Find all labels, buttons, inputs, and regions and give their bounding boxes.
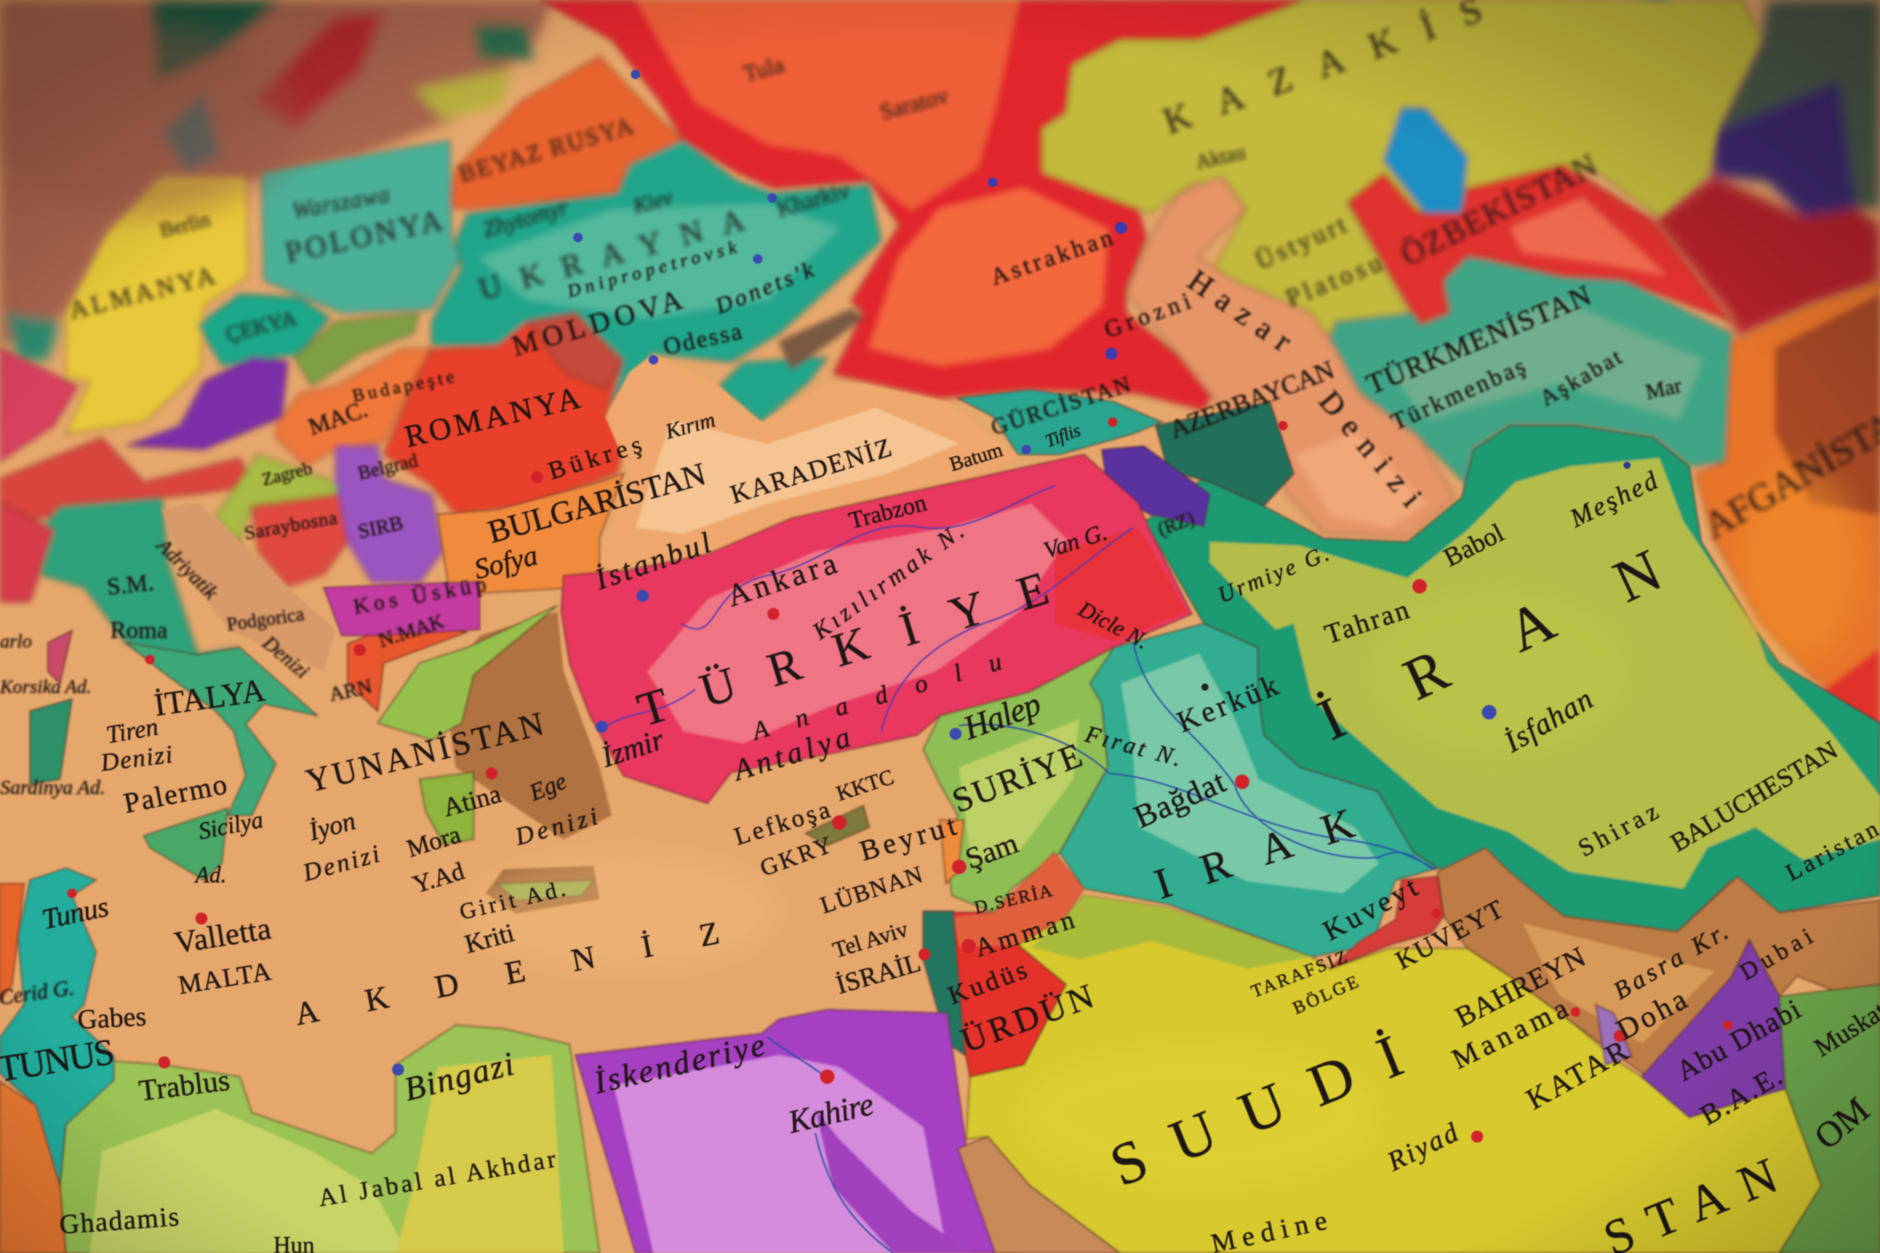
label: Kuveyt country: KUVEYT bbox=[1391, 895, 1508, 975]
label: İsrail: İSRAİL bbox=[833, 948, 924, 1000]
region: Egypt Nile band bbox=[815, 1109, 971, 1253]
label: Doha: Doha bbox=[1611, 983, 1692, 1047]
region: Jordan bbox=[946, 853, 1084, 1077]
label: Almanya: ALMANYA bbox=[67, 263, 218, 325]
label: Kiev: Kiev bbox=[630, 185, 675, 219]
label: Van G.: Van G. bbox=[1041, 520, 1111, 564]
label: Hazar: Hazar bbox=[1182, 262, 1299, 359]
label: Türkmenbaşı: Türkmenbaş bbox=[1387, 354, 1529, 436]
region: Afghanistan south red bbox=[1821, 647, 1880, 731]
region: Albania bbox=[348, 624, 468, 711]
label: Denizi Adriatic: Denizi bbox=[257, 631, 313, 683]
region: Egypt border bbox=[576, 1010, 1019, 1253]
label: Kriti: Kriti bbox=[462, 918, 517, 959]
label: Akdeniz: AKDENİZ bbox=[292, 906, 770, 1033]
label: Şiraz: Shiraz bbox=[1574, 798, 1663, 863]
region: Crete shadow bbox=[486, 866, 599, 914]
region: Israel bbox=[923, 911, 965, 1055]
region: Caspian Sea bbox=[1126, 176, 1456, 538]
region: Turkey pale interior bbox=[647, 504, 1067, 743]
label: Tel Aviv: Tel Aviv bbox=[830, 916, 911, 963]
region: Libya bbox=[60, 1025, 599, 1253]
label: Ghadamis: Ghadamis bbox=[58, 1200, 180, 1240]
label: Kerkük: Kerkük bbox=[1172, 669, 1283, 739]
label: Aşkabat: Aşkabat bbox=[1535, 344, 1626, 411]
label: Irak: IRAK bbox=[1149, 790, 1392, 909]
region: Algeria north bbox=[0, 884, 24, 1001]
label: Trablus: Trablus bbox=[137, 1064, 232, 1108]
label: Katar: KATAR bbox=[1521, 1034, 1633, 1116]
region: Armenia bbox=[1102, 446, 1210, 526]
region: Russia orange north bbox=[635, 0, 1019, 210]
region: Romania bbox=[384, 313, 629, 514]
region: Saudi Arabia bbox=[966, 896, 1821, 1253]
label: Beyrut: Beyrut bbox=[856, 810, 960, 868]
label: Bükreş: Bükreş bbox=[545, 431, 645, 485]
label: Yunanistan: YUNANİSTAN bbox=[302, 706, 547, 800]
region: Belarus bbox=[450, 56, 683, 209]
label: Moldova: MOLDOVA bbox=[509, 284, 686, 363]
label: Dubai: Dubai bbox=[1736, 924, 1818, 986]
label: İstanbul: İstanbul bbox=[590, 526, 715, 597]
in-focus regions bbox=[0, 354, 1880, 1253]
region: Hungary bbox=[276, 349, 432, 466]
label: Fırat N.: Fırat N. bbox=[1081, 721, 1184, 772]
label: Adriyatik: Adriyatik bbox=[151, 533, 222, 605]
region: France and Switzerland edge bbox=[0, 348, 78, 462]
far out-of-focus regions bbox=[0, 0, 1880, 361]
region: Caspian Sea interior bbox=[1295, 432, 1427, 528]
region: Afghanistan bbox=[1695, 282, 1880, 728]
label: Grozni: Grozni bbox=[1101, 288, 1195, 344]
region: Thrace and north Greece bbox=[378, 606, 558, 740]
label: Bağdat: Bağdat bbox=[1129, 764, 1231, 836]
region: Lebanon bbox=[940, 820, 964, 884]
region: Red Sea bbox=[958, 1137, 1120, 1253]
region: Crete bbox=[498, 880, 593, 900]
label: Tebriz region: (RZ) bbox=[1155, 508, 1197, 541]
label: Şam: Şam bbox=[961, 827, 1022, 876]
label: left edge labels: arlo bbox=[0, 631, 32, 652]
label: Aktau: Aktau bbox=[1194, 141, 1247, 174]
label: İskenderiye: İskenderiye bbox=[590, 1027, 768, 1102]
region: Croatia bbox=[216, 454, 342, 578]
region: Azerbaijan bbox=[1156, 402, 1294, 506]
label: Ürdün: ÜRDÜN bbox=[956, 976, 1099, 1060]
label: Kahire: Kahire bbox=[784, 1086, 877, 1141]
label: Beluçistan: BALUCHESTAN bbox=[1666, 735, 1843, 858]
label: Platosu: Platosu bbox=[1282, 250, 1386, 313]
region: Crimea bbox=[719, 357, 827, 422]
label: Basra Kr.: Basra Kr. bbox=[1609, 918, 1733, 1005]
region: Bosnia bbox=[252, 494, 348, 586]
label: Bölge: BÖLGE bbox=[1290, 971, 1361, 1018]
region: dark green north bbox=[150, 0, 282, 84]
label: Beyaz Rusya: BEYAZ RUSYA bbox=[456, 113, 637, 188]
label: İzmir: İzmir bbox=[596, 723, 668, 774]
region: Poland bbox=[261, 140, 462, 313]
region: Moldova bbox=[528, 313, 623, 390]
out-of-focus map labels bbox=[67, 0, 1880, 547]
region: Tajikistan purple bbox=[1713, 80, 1857, 217]
label: GKRY: GKRY bbox=[757, 832, 836, 882]
label: Girit Ad.: Girit Ad. bbox=[457, 876, 568, 925]
region: Uzbekistan interior bbox=[1511, 198, 1667, 276]
region: Syria interior bbox=[959, 719, 1079, 863]
label: Tahran: Tahran bbox=[1321, 593, 1413, 650]
region: Iran border green bbox=[1145, 426, 1880, 932]
label: Tiren: Tiren bbox=[104, 714, 160, 749]
region: Gulf pale water bbox=[1523, 923, 1715, 1043]
label: Malta: MALTA bbox=[176, 957, 273, 1000]
in-focus map labels bbox=[0, 380, 1880, 1253]
region: Aegean shaded bbox=[444, 612, 611, 839]
region: Macedonia and Kosovo bbox=[324, 582, 480, 635]
region: Austria bbox=[126, 357, 288, 450]
label: Denizi Ionian: Denizi bbox=[299, 841, 383, 887]
region: Kyrgyzstan dark red bbox=[1653, 176, 1880, 337]
label: Polonya: POLONYA bbox=[282, 204, 446, 269]
region: Italy south bbox=[126, 643, 318, 815]
label: Lübnan: LÜBNAN bbox=[818, 862, 926, 919]
region: Sardinia bbox=[30, 699, 72, 784]
region: UAE bbox=[1641, 940, 1785, 1117]
label: Babol: Babol bbox=[1439, 518, 1508, 572]
label: Y.Ad.: Y.Ad bbox=[410, 858, 468, 899]
region: far east dark bbox=[1713, 0, 1880, 209]
label: Donets: Donets'k bbox=[711, 257, 818, 319]
label: Tarafsız: TARAFSIZ bbox=[1248, 947, 1350, 1001]
label: Denizi Aegean: Denizi bbox=[512, 803, 601, 851]
label: Sicilya: Sicilya bbox=[196, 807, 265, 845]
label: Sardinya Ad.: Sardinya Ad. bbox=[0, 777, 105, 799]
region: Aral Sea bbox=[1384, 108, 1468, 213]
label: Çekya: ÇEKYA bbox=[223, 306, 299, 347]
region: Turkmenistan interior bbox=[1391, 300, 1703, 420]
region: Ukraine bbox=[432, 140, 881, 422]
label: Azerbaycan: AZERBAYCAN bbox=[1166, 355, 1338, 444]
label: Korsika: Korsika Ad. bbox=[0, 677, 91, 698]
label: Kızılırmak: Kızılırmak N. bbox=[808, 518, 969, 646]
label: Kharkiv: Kharkiv bbox=[774, 177, 853, 222]
label: Arnavutluk: ARN bbox=[327, 676, 374, 706]
region: teal sliver bbox=[162, 92, 222, 173]
label: Türkmenistan: TÜRKMENİSTAN bbox=[1362, 279, 1596, 401]
label: Ege: Ege bbox=[525, 768, 571, 807]
region: Serbia bbox=[336, 446, 444, 583]
label: Suudi: SUUDİ bbox=[1101, 1011, 1440, 1199]
label: Antalya: Antalya bbox=[728, 721, 854, 788]
label: Mora: Mora bbox=[404, 821, 464, 863]
region: Afghanistan dark north bbox=[1774, 294, 1880, 516]
rivers and river lines bbox=[605, 486, 1435, 1253]
label: KKTC: KKTC bbox=[833, 765, 897, 806]
region: Turkmenistan bbox=[1330, 257, 1731, 486]
label: Saraybosna: Saraybosna bbox=[243, 507, 339, 544]
region: Iraq bbox=[1060, 624, 1438, 957]
label: Kuzey Makedonya: N.MAK bbox=[376, 610, 447, 652]
region: Kazakhstan far east lake bbox=[1641, 0, 1671, 48]
label: Kudüs: Kudüs bbox=[944, 955, 1031, 1010]
region: Slovakia bbox=[294, 313, 420, 386]
label: Podgorica: Podgorica bbox=[226, 604, 306, 636]
region: Bulgaria bbox=[438, 474, 623, 595]
region: Jordan north bbox=[953, 853, 1084, 947]
label: Laristan: Laristan bbox=[1782, 816, 1880, 887]
label: Bahreyn: BAHREYN bbox=[1450, 941, 1591, 1034]
region: Uzbekistan bbox=[1348, 164, 1731, 325]
label: B.A.E.: B.A.E. bbox=[1695, 1060, 1788, 1132]
label: Kuveyt city: Kuveyt bbox=[1318, 871, 1423, 947]
region: Netherlands bbox=[6, 313, 60, 361]
label: Sofya: Sofya bbox=[471, 539, 541, 586]
slightly soft map labels bbox=[0, 225, 1684, 1010]
label: Italya: İTALYA bbox=[152, 672, 268, 724]
label: Batum: Batum bbox=[947, 439, 1006, 476]
region: Kuwait bbox=[1330, 876, 1444, 969]
label: Amman: Amman bbox=[972, 905, 1078, 963]
region: Turkey east red bbox=[1055, 528, 1187, 641]
label: Üstyurt: Üstyurt bbox=[1252, 212, 1350, 275]
label: Urmiye G.: Urmiye G. bbox=[1214, 541, 1333, 608]
region: Russia orange south bbox=[869, 188, 1108, 366]
region: Czechia bbox=[198, 294, 330, 366]
label: Rusya city two: Saratov bbox=[877, 82, 952, 125]
label: Suriye: SURİYE bbox=[947, 735, 1087, 820]
label: San Marino: S.M. bbox=[106, 570, 155, 601]
label: Bingazi: Bingazi bbox=[401, 1046, 518, 1108]
region: Black Sea pale centre bbox=[635, 408, 959, 534]
middle focus regions bbox=[0, 0, 1880, 731]
label: Denizi Tyrrhenian: Denizi bbox=[98, 741, 174, 777]
label: Roma: Roma bbox=[110, 618, 168, 644]
label: Jitomir: Zhytomyr bbox=[480, 194, 571, 242]
region: Turkey bbox=[561, 454, 1192, 803]
label: Sırbistan: SIRB bbox=[356, 512, 405, 543]
label: Tunus city: Tunus bbox=[39, 891, 111, 936]
label: Palermo: Palermo bbox=[121, 768, 230, 820]
label: Meşhed: Meşhed bbox=[1564, 466, 1663, 533]
region: Syria bbox=[923, 647, 1114, 912]
region: Persian Gulf bbox=[1438, 848, 1880, 1077]
label: Anadolu: Anadolu bbox=[748, 641, 1033, 746]
region: Kazakhstan bbox=[1042, 0, 1761, 333]
label: Valletta: Valletta bbox=[172, 910, 273, 960]
label: Halep: Halep bbox=[958, 685, 1046, 748]
region: Tunisia bbox=[0, 868, 114, 1186]
label: Bükreş Macar label: MAC. bbox=[305, 397, 371, 441]
region: Oman bbox=[1779, 984, 1880, 1253]
label: Belgrad: Belgrad bbox=[356, 450, 420, 484]
region: Iraq pale interior bbox=[1121, 653, 1379, 893]
label: İyon: İyon bbox=[305, 806, 359, 847]
region: Georgia bbox=[958, 390, 1162, 454]
label: Merv: Mar bbox=[1643, 373, 1684, 404]
label: Karadeniz: KARADENİZ bbox=[727, 433, 895, 509]
label: Al Jabal al Akhdar: Al Jabal al Akhdar bbox=[317, 1146, 558, 1212]
label: Türkiye: TÜRKİYE bbox=[632, 551, 1089, 737]
region: western edge crimson bbox=[0, 502, 54, 602]
region: Saudi north lime bbox=[1031, 896, 1312, 969]
region: Algeria south bbox=[0, 1082, 66, 1253]
label: Denizi Caspian: Denizi bbox=[1312, 384, 1430, 514]
label: Lefkoşa: Lefkoşa bbox=[731, 796, 833, 851]
label: Rusya city: Tula bbox=[741, 52, 787, 86]
region: Peloponnese bbox=[420, 772, 474, 844]
region: Baltics bbox=[414, 68, 510, 120]
label: Dicle N.: Dicle N. bbox=[1073, 596, 1153, 654]
label: Budapeşte: Budapeşte bbox=[351, 366, 456, 406]
label: Özbekistan: ÖZBEKİSTAN bbox=[1395, 147, 1603, 273]
label: Tiflis: Tiflis bbox=[1042, 420, 1083, 451]
region: Baltic north bbox=[474, 24, 534, 60]
label: Ankara: Ankara bbox=[723, 545, 841, 613]
label: Berlin: Berlin bbox=[158, 209, 212, 242]
label: Varşova: Warszawa bbox=[290, 181, 391, 223]
label: Gabes: Gabes bbox=[77, 1000, 147, 1035]
label: İran: İRAN bbox=[1308, 505, 1739, 753]
label: Riyad: Riyad bbox=[1381, 1116, 1463, 1177]
region: Russia bbox=[540, 0, 1306, 410]
label: İsfahan: İsfahan bbox=[1498, 683, 1598, 760]
label: Umman: OM bbox=[1807, 1089, 1877, 1157]
region: Italy north bbox=[30, 498, 240, 671]
region: Germany bbox=[66, 176, 248, 434]
label: Kosova and Üsküp: Kos Üsküp bbox=[352, 572, 488, 619]
label: Manama: Manama bbox=[1447, 992, 1573, 1076]
label: Zagreb: Zagreb bbox=[260, 458, 314, 490]
label: Romanya: ROMANYA bbox=[401, 380, 584, 454]
label: Ukrayna: UKRAYNA bbox=[475, 202, 748, 307]
region: Iran bbox=[1210, 458, 1880, 888]
label: Dnipropetrovsk: Dnipropetrovsk bbox=[564, 237, 739, 302]
region: Cyprus bbox=[806, 806, 869, 845]
region: Black Sea bbox=[597, 354, 1019, 576]
region: Qatar bbox=[1596, 1005, 1632, 1065]
region: Corsica bbox=[48, 631, 72, 683]
label: Trabzon: Trabzon bbox=[846, 490, 929, 535]
region: Egypt interior bbox=[614, 1055, 947, 1253]
label: Dımeşk small: D.SERİA bbox=[972, 880, 1054, 918]
label: Ad. near Sicily: Ad. bbox=[193, 862, 226, 887]
region: dark red streaks bbox=[252, 12, 384, 128]
city markers bbox=[67, 70, 1733, 1143]
region: Ukraine interior bbox=[480, 204, 839, 318]
region: Sea of Azov bbox=[779, 309, 863, 369]
label: Abu Dhabi: Abu Dhabi bbox=[1671, 993, 1806, 1088]
label: Atina: Atina bbox=[440, 779, 504, 822]
label: Astrahan: Astrakhan bbox=[987, 225, 1116, 291]
region: Dalmatian coast bbox=[162, 502, 336, 671]
label: Kırım: Kırım bbox=[662, 407, 718, 444]
region: north-west Europe bbox=[0, 0, 552, 348]
label: Gürcistan: GÜRCİSTAN bbox=[988, 371, 1133, 440]
label: Bulgaristan: BULGARİSTAN bbox=[484, 456, 710, 551]
region: Slovenia and north Italy bbox=[0, 438, 252, 522]
region: Libya west pale bbox=[90, 1109, 408, 1253]
label: Odessa: Odessa bbox=[661, 319, 744, 361]
region: Libya east yellow bbox=[396, 1055, 564, 1253]
region: Sicily bbox=[144, 808, 228, 880]
